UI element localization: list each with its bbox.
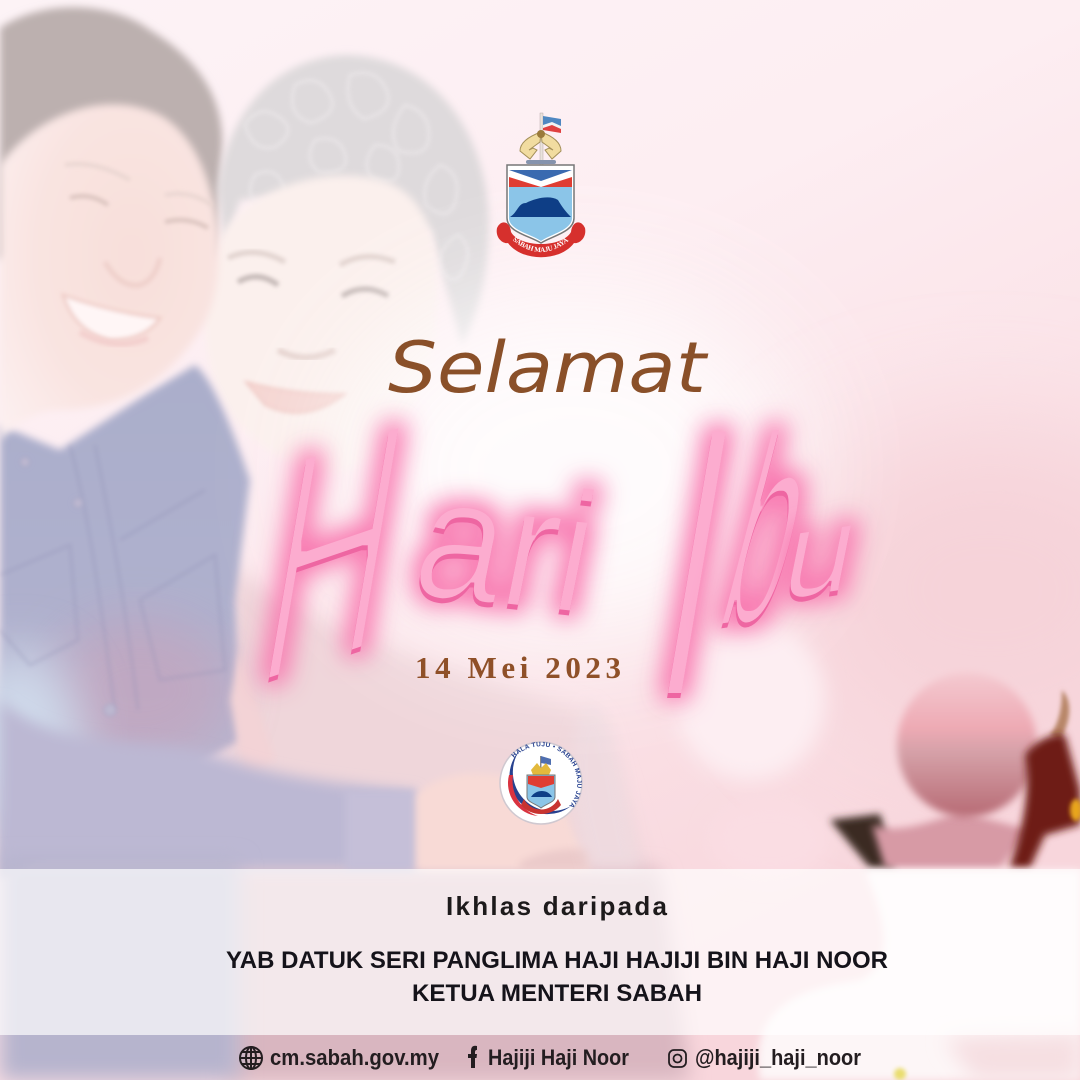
stem — [872, 812, 1030, 868]
message band — [0, 869, 1080, 1035]
sender intro: Ikhlas daripada — [446, 891, 668, 921]
shirt light fade — [0, 650, 80, 830]
shield — [507, 165, 574, 243]
mother sleeve — [571, 700, 640, 870]
neon letter u: u — [773, 476, 870, 627]
date: 14 Mei 2023 — [415, 650, 621, 685]
mother nose — [278, 350, 335, 358]
badge crown — [531, 763, 551, 775]
sender role: KETUA MENTERI SABAH — [412, 980, 702, 1007]
motto: SABAH MAJU JAYA — [512, 237, 569, 252]
icon: facebook — [468, 1046, 477, 1068]
campaign badge — [499, 741, 583, 825]
mountain — [510, 197, 571, 217]
heading: Selamat: Selamat — [388, 327, 709, 409]
shield red chevron — [509, 177, 572, 187]
badge shield — [527, 775, 555, 808]
neon title: Hari Ibu — [238, 345, 870, 775]
daughter eyes — [70, 196, 208, 228]
shirt seams — [0, 445, 225, 710]
red arc — [508, 775, 538, 816]
pink haze right — [790, 430, 1080, 750]
pollen — [894, 1068, 906, 1080]
pole — [540, 113, 543, 165]
flag — [543, 116, 561, 133]
hand — [416, 773, 590, 870]
crest: Sabah coat of arms — [496, 112, 586, 258]
facebook name: Hajiji Haji Noor — [488, 1045, 629, 1070]
sepal tip — [1050, 690, 1069, 740]
badge ribbon — [521, 799, 561, 814]
icon: globe — [240, 1047, 262, 1069]
neon letters ari: ari — [401, 441, 612, 650]
shield sky — [509, 187, 572, 241]
arms — [520, 132, 561, 159]
daughter hair — [0, 7, 222, 260]
shield blue chevron — [509, 170, 572, 181]
neon letter H: H — [238, 345, 429, 762]
fingers — [520, 849, 590, 870]
badge pole — [540, 756, 542, 770]
mother eyes — [238, 277, 388, 296]
petal pink — [945, 1030, 1080, 1080]
footer strip — [240, 1045, 861, 1070]
flower — [758, 673, 1080, 1080]
instagram handle: @hajiji_haji_noor — [695, 1045, 861, 1070]
white petals — [758, 870, 1080, 1080]
hair curls — [245, 73, 468, 280]
badge text ring: HALA TUJU • SABAH MAJU JAYA — [511, 742, 582, 808]
bokeh low — [710, 800, 830, 880]
badge disc — [500, 742, 582, 824]
neon letter b: b — [697, 371, 841, 688]
lower sleeve below band — [0, 860, 240, 1080]
daughter face — [0, 104, 219, 440]
cuff — [345, 790, 416, 870]
icon: instagram — [669, 1050, 686, 1067]
badge chevron — [528, 776, 554, 788]
website: cm.sabah.gov.my — [270, 1045, 440, 1070]
mother face — [205, 176, 437, 472]
mother sweater below band — [230, 870, 690, 1080]
badge mountain — [531, 791, 552, 797]
sleeve — [0, 700, 416, 870]
mother smile — [246, 382, 345, 413]
daughter smile — [63, 295, 160, 340]
shirt mauve fold — [50, 620, 230, 760]
mother hair — [218, 55, 489, 345]
mother brows — [228, 252, 395, 265]
photo: mother and daughter — [0, 7, 690, 1080]
flag red — [543, 125, 561, 133]
daughter brows — [65, 164, 212, 205]
daughter lower lip — [80, 332, 148, 344]
white glow behind title — [340, 290, 800, 650]
skin beside shirt — [230, 650, 275, 780]
stamen — [1070, 799, 1080, 821]
sender name: YAB DATUK SERI PANGLIMA HAJI HAJIJI BIN HAJI NOOR — [226, 947, 888, 974]
daughter nose — [105, 258, 160, 285]
stem dark — [830, 814, 895, 868]
flag blue — [543, 116, 561, 126]
denim shirt — [0, 365, 250, 880]
blue arc — [509, 751, 571, 814]
bud — [897, 673, 1037, 817]
badge flag — [541, 756, 551, 765]
hand — [537, 130, 545, 138]
lower body of mother — [225, 560, 680, 1080]
neon letter I: I — [629, 350, 765, 775]
wreath — [526, 160, 556, 164]
bokeh circle — [675, 620, 825, 780]
scroll — [497, 222, 585, 257]
shirt buttons — [20, 457, 116, 716]
sepals — [1010, 734, 1080, 868]
